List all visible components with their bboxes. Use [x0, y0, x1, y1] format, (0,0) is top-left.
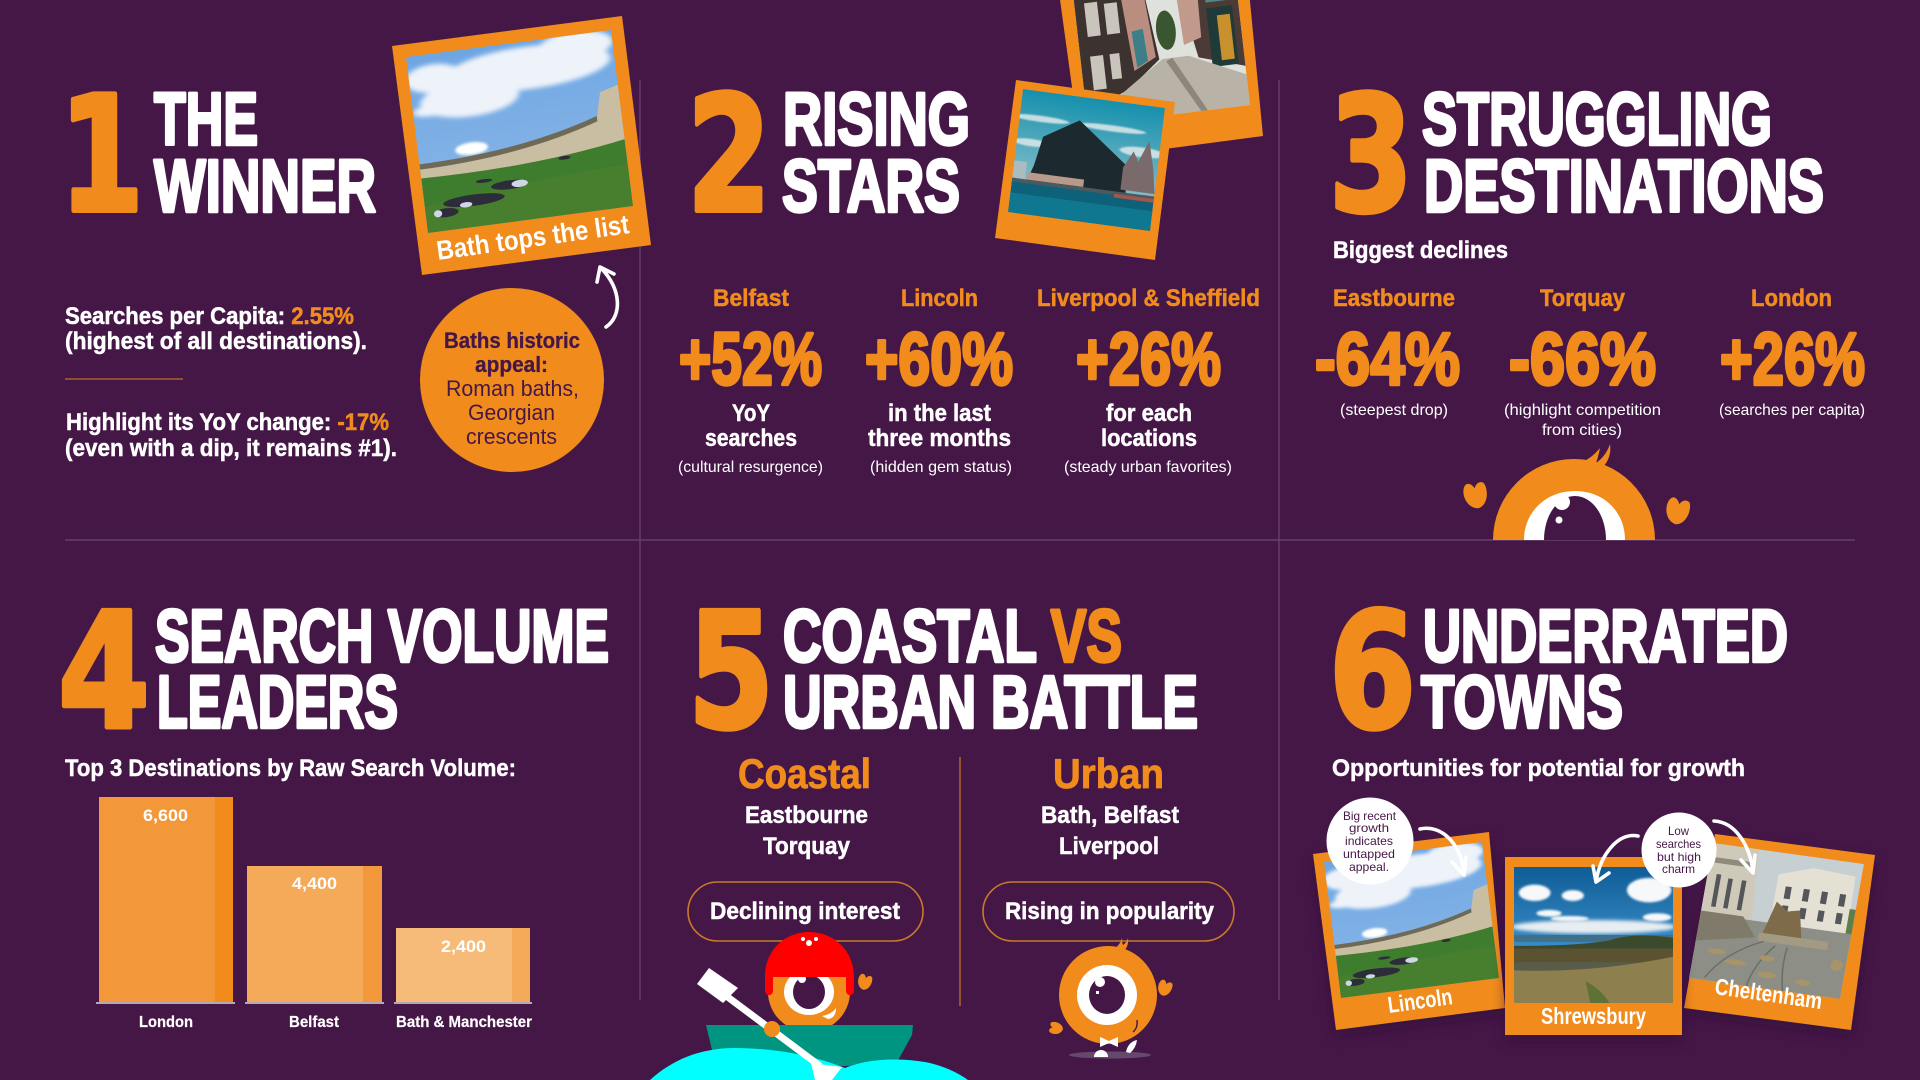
photo: waterfront [995, 80, 1175, 260]
callout: low searches: searches [1656, 837, 1701, 851]
panel: 4 search volume leaders [58, 578, 609, 1031]
heading: underrated towns: TOWNS [1421, 660, 1623, 744]
bar: London [96, 797, 235, 1031]
pill: declining interest [688, 882, 923, 941]
number 1: 1 [59, 62, 144, 248]
callout: big recent growth: Big recent [1343, 809, 1397, 823]
photo: Shrewsbury: Shrewsbury [1541, 1003, 1646, 1029]
arrow: to Cheltenham photo [1714, 821, 1755, 873]
number 4: 4 [58, 578, 150, 765]
stat: London: London [1751, 285, 1832, 312]
callout: historic appeal: appeal: [475, 352, 548, 377]
callout: big recent growth: growth [1349, 821, 1389, 835]
heading: struggling destinations: STRUGGLING [1422, 78, 1772, 160]
stat: Liverpool and Sheffield [1037, 285, 1260, 476]
pill: declining interest: Declining interest [710, 898, 900, 925]
photo: Lincoln: Lincoln [1386, 983, 1454, 1018]
photo: Shrewsbury [1505, 857, 1682, 1041]
panel: 5 coastal vs urban battle [650, 578, 1234, 1080]
callout: low searches: but high [1657, 850, 1701, 864]
subheading: opportunities: Opportunities for potential for growth [1332, 755, 1745, 782]
column: coastal: Torquay [763, 833, 851, 860]
stat: Lincoln [865, 285, 1013, 476]
stat: Belfast: Belfast [713, 285, 789, 312]
heading: search volume leaders: LEADERS [157, 660, 398, 744]
callout: low searches [1642, 812, 1716, 888]
photo: street [1058, 0, 1263, 160]
stat: Belfast: YoY [732, 400, 770, 427]
stat: Lincoln: Lincoln [901, 285, 978, 312]
stat: Liverpool and Sheffield: Liverpool & Sheffield [1037, 285, 1260, 312]
stat: London: +26% [1720, 318, 1865, 400]
text: searches per capita: Searches per Capita: 2.55% [65, 303, 354, 330]
callout: historic appeal [420, 288, 604, 472]
stat: Torquay [1504, 285, 1661, 439]
photo: Cheltenham: Cheltenham [1713, 973, 1824, 1014]
text: searches per capita: (highest of all destinations). [65, 328, 367, 355]
arrow: to Lincoln photo [1420, 828, 1466, 875]
heading: struggling destinations [1422, 78, 1824, 228]
text: YoY change [65, 409, 397, 462]
bar: Bath and Manchester: 2,400 [441, 937, 486, 956]
pill: rising in popularity [983, 882, 1234, 941]
stat: Torquay: (highlight competition [1504, 402, 1661, 419]
stat: Eastbourne: (steepest drop) [1340, 402, 1448, 419]
callout: low searches: charm [1662, 862, 1695, 876]
heading: search volume leaders: SEARCH VOLUME [155, 594, 609, 678]
stat: Belfast: +52% [679, 318, 822, 400]
icon: kayak mascot [650, 932, 968, 1080]
heading: rising stars [782, 78, 970, 228]
pill: rising in popularity: Rising in popularity [1005, 898, 1215, 925]
stat: Torquay: Torquay [1540, 285, 1626, 312]
column: coastal: Eastbourne [745, 802, 868, 829]
column: coastal: Coastal [738, 750, 871, 797]
column: urban: Urban [1053, 750, 1164, 797]
text: YoY change: Highlight its YoY change: -17% [66, 409, 389, 436]
column: urban: Bath, Belfast [1041, 802, 1179, 829]
arrow: to Shrewsbury photo [1593, 836, 1638, 882]
callout: historic appeal: Baths historic [444, 328, 580, 353]
heading: rising stars: RISING [783, 78, 970, 160]
photo: Bath tops the list: Bath tops the list [435, 209, 631, 266]
stat: Liverpool and Sheffield: for each [1106, 400, 1192, 427]
stat: Lincoln: +60% [865, 318, 1013, 400]
number 6: 6 [1329, 578, 1416, 765]
stat: Liverpool and Sheffield: +26% [1076, 318, 1221, 400]
photo: Bath tops the list [392, 16, 651, 275]
bar: Belfast: Belfast [289, 1014, 340, 1031]
arrow: callout to photo [597, 267, 617, 327]
bar: London: London [139, 1014, 193, 1031]
panel: 2 rising stars [678, 0, 1263, 476]
heading: coastal vs urban battle [783, 594, 1198, 744]
number 2: 2 [687, 62, 771, 248]
photo: Lincoln [1313, 832, 1505, 1036]
callout: big recent growth: untapped [1343, 847, 1395, 861]
bar: Belfast [245, 866, 384, 1031]
stat: Eastbourne [1315, 285, 1460, 419]
column: urban [1041, 750, 1179, 860]
callout: big recent growth [1326, 798, 1414, 884]
stat: London: (searches per capita) [1719, 402, 1865, 419]
stat: Eastbourne: Eastbourne [1333, 285, 1455, 312]
subheading: top 3 destinations: Top 3 Destinations by Raw Search Volume: [65, 755, 516, 782]
number 5: 5 [688, 578, 774, 765]
text: YoY change: (even with a dip, it remains #1). [65, 435, 397, 462]
stat: Liverpool and Sheffield: (steady urban favorites) [1064, 459, 1232, 476]
bar: Bath and Manchester [394, 928, 532, 1031]
heading: underrated towns [1421, 594, 1788, 744]
stat: Belfast [678, 285, 823, 476]
stat: Belfast: (cultural resurgence) [678, 459, 823, 476]
stat: Torquay: -66% [1509, 318, 1656, 400]
column: urban: Liverpool [1059, 833, 1159, 860]
bar: London: 6,600 [143, 806, 188, 825]
bar chart [96, 797, 532, 1031]
column: coastal [738, 750, 871, 860]
callout: big recent growth: appeal. [1349, 860, 1389, 874]
panel: 6 underrated towns [1313, 578, 1875, 1041]
stat: Liverpool and Sheffield: locations [1101, 425, 1197, 452]
heading: the winner [154, 78, 376, 228]
callout: low searches: Low [1668, 824, 1689, 838]
stat: Lincoln: (hidden gem status) [870, 459, 1012, 476]
icon: peeking mascot [1462, 444, 1692, 540]
bar: Belfast: 4,400 [292, 874, 337, 893]
heading: the winner: THE [154, 78, 258, 160]
icon: urban mascot [1049, 938, 1174, 1058]
heading: search volume leaders [155, 594, 609, 744]
stat: Lincoln: three months [868, 425, 1011, 452]
callout: big recent growth: indicates [1345, 834, 1393, 848]
callout: historic appeal: crescents [466, 424, 557, 449]
text: searches per capita [65, 303, 367, 355]
stat: Lincoln: in the last [888, 400, 991, 427]
heading: the winner: WINNER [154, 144, 376, 228]
stat: Torquay: from cities) [1542, 422, 1622, 439]
subheading: biggest declines: Biggest declines [1333, 237, 1508, 264]
stat: London [1719, 285, 1865, 419]
callout: historic appeal: Roman baths, [446, 376, 579, 401]
heading: coastal vs urban battle: COASTAL VS [783, 594, 1122, 678]
stat: Belfast: searches [705, 425, 797, 452]
photo: Cheltenham [1684, 834, 1875, 1036]
heading: coastal vs urban battle: URBAN BATTLE [783, 660, 1198, 744]
callout: historic appeal: Georgian [468, 400, 555, 425]
number 3: 3 [1329, 62, 1413, 248]
panel: 3 struggling destinations [1315, 62, 1865, 540]
heading: rising stars: STARS [782, 144, 960, 228]
stat: Eastbourne: -64% [1315, 318, 1460, 400]
bar: Bath and Manchester: Bath & Manchester [396, 1014, 532, 1031]
panel: 1 the winner [59, 16, 651, 472]
